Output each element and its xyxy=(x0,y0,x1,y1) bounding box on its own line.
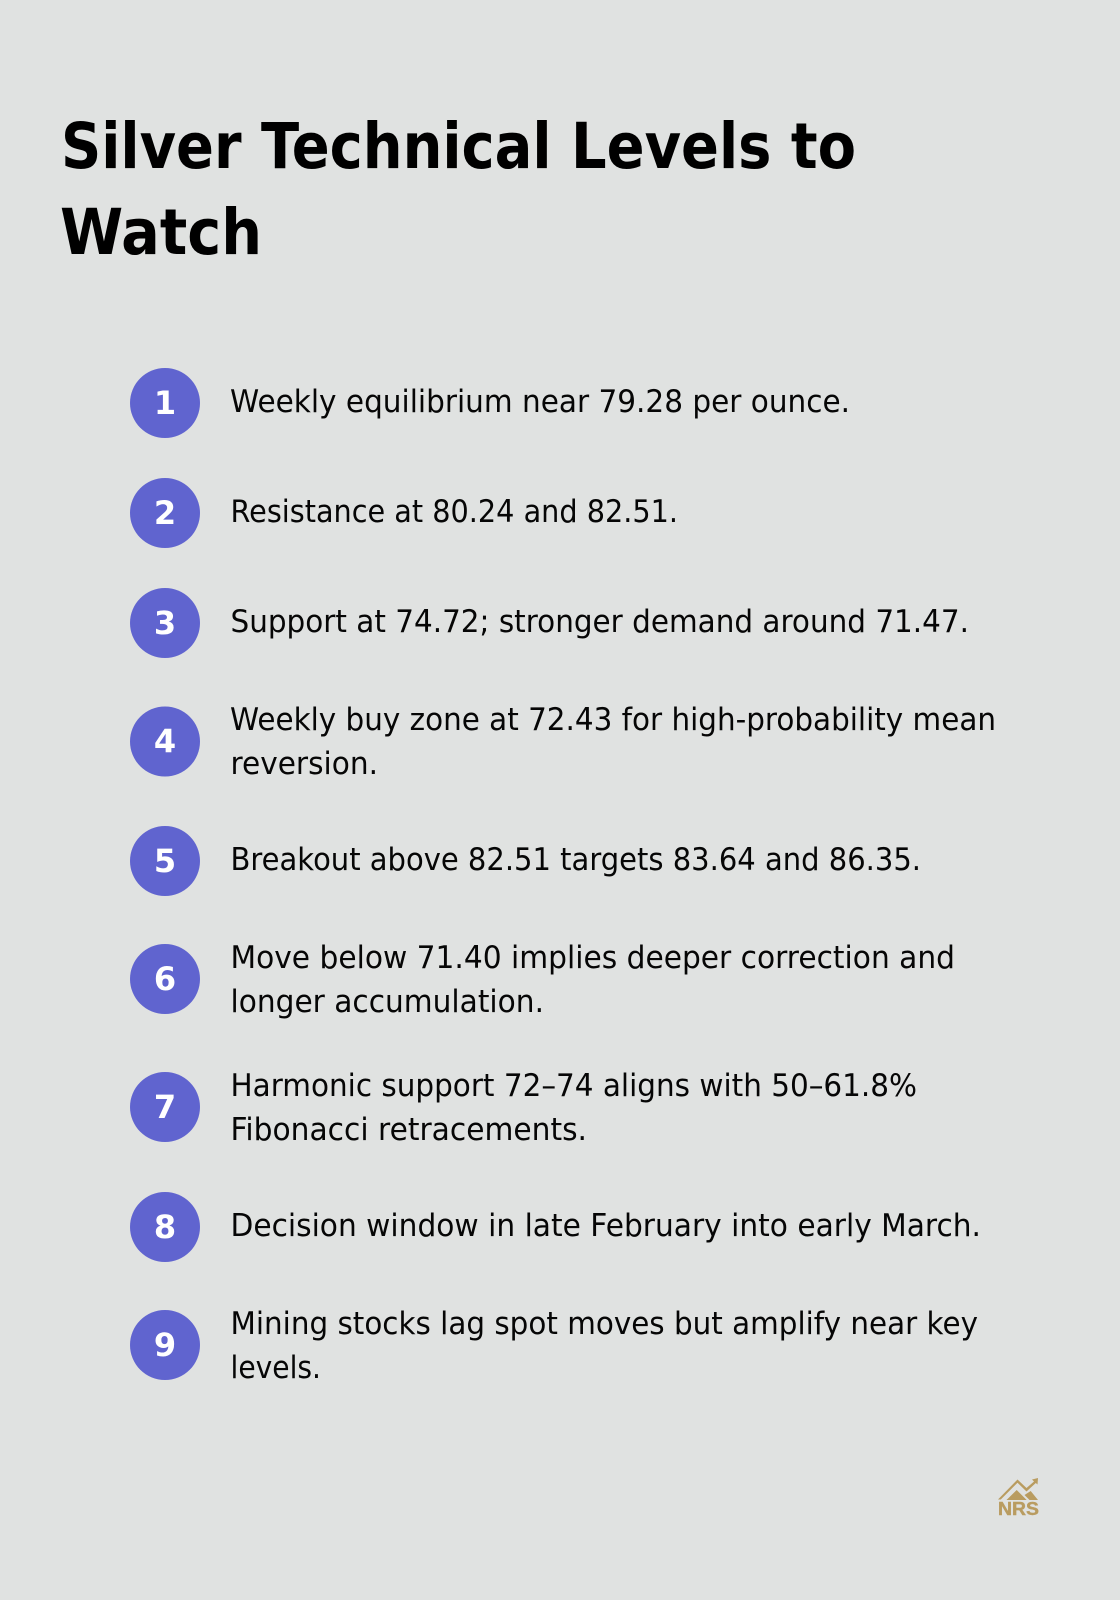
item 9 text xyxy=(230,1306,978,1386)
title: Watch xyxy=(60,196,262,269)
list item 2 xyxy=(130,478,678,548)
item 9 text: Mining stocks lag spot moves but amplify near key xyxy=(230,1306,978,1342)
item 8 text: Decision window in late February into early March. xyxy=(230,1208,981,1244)
item 4 text: Weekly buy zone at 72.43 for high-probability mean xyxy=(230,702,996,738)
item 7 text: Harmonic support 72–74 aligns with 50–61.8% xyxy=(230,1068,917,1104)
list item 1 xyxy=(130,368,850,438)
item 3 text: Support at 74.72; stronger demand around 71.47. xyxy=(230,604,969,640)
number badge 4 xyxy=(130,706,200,776)
title xyxy=(60,110,856,269)
number badge 9 xyxy=(130,1310,200,1380)
item 1 text: Weekly equilibrium near 79.28 per ounce. xyxy=(230,384,850,420)
number badge 8 xyxy=(130,1192,200,1262)
number badge 5: 5 xyxy=(154,842,176,880)
number badge 7 xyxy=(130,1072,200,1142)
logo wordmark: NRS xyxy=(998,1498,1039,1519)
item 5 text: Breakout above 82.51 targets 83.64 and 86.35. xyxy=(230,842,921,878)
number badge 2: 2 xyxy=(154,494,176,532)
title: Silver Technical Levels to xyxy=(61,110,856,183)
list item 3 xyxy=(130,588,969,658)
number badge 2 xyxy=(130,478,200,548)
number badge 1 xyxy=(130,368,200,438)
item 2 text: Resistance at 80.24 and 82.51. xyxy=(230,494,678,530)
number badge 1: 1 xyxy=(154,384,176,422)
icon: roofline with rising arrow xyxy=(998,1478,1038,1500)
list item 7 xyxy=(130,1068,917,1148)
number badge 6 xyxy=(130,944,200,1014)
logo: NRS xyxy=(998,1478,1039,1519)
number badge 3: 3 xyxy=(154,604,176,642)
list item 4 xyxy=(130,702,996,782)
number badge 7: 7 xyxy=(154,1088,176,1126)
list item 6 xyxy=(130,940,955,1020)
number badge 3 xyxy=(130,588,200,658)
number badge 5 xyxy=(130,826,200,896)
list item 8 xyxy=(130,1192,981,1262)
number badge 6: 6 xyxy=(154,960,176,998)
item 4 text: reversion. xyxy=(230,746,378,782)
item 9 text: levels. xyxy=(230,1350,321,1386)
item 6 text: longer accumulation. xyxy=(230,984,544,1020)
item 6 text xyxy=(230,940,955,1020)
number badge 8: 8 xyxy=(154,1208,176,1246)
item 7 text xyxy=(230,1068,917,1148)
number badge 9: 9 xyxy=(154,1326,176,1364)
item 6 text: Move below 71.40 implies deeper correction and xyxy=(230,940,955,976)
number badge 4: 4 xyxy=(154,722,176,760)
item 4 text xyxy=(230,702,996,782)
item 7 text: Fibonacci retracements. xyxy=(230,1112,587,1148)
list item 9 xyxy=(130,1306,978,1386)
list item 5 xyxy=(130,826,921,896)
